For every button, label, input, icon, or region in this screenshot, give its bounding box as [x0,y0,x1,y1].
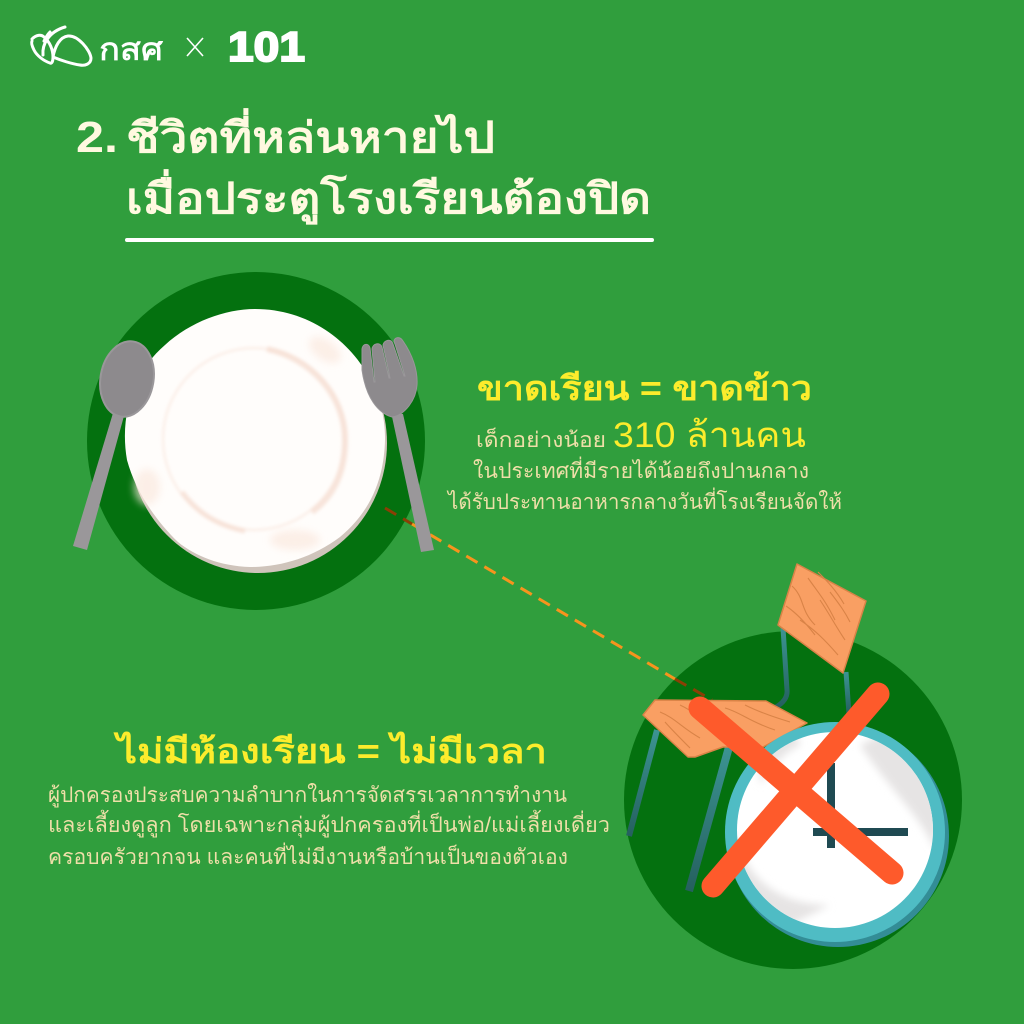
icon: กสศ leaf mark [32,27,91,65]
text block: no classroom equals no time [48,731,610,869]
title line 1: ชีวิตที่หล่นหายไป [126,108,495,161]
clock face shading [744,738,933,922]
fork head [362,338,417,417]
plate shadow edge [129,313,387,573]
body line 3: ได้รับประทานอาหารกลางวันที่โรงเรียนจัดให้ [446,487,842,514]
minute hand [827,763,835,848]
hour hand [813,828,908,836]
logo: partner logos [32,23,305,70]
illustration: chair [629,564,866,891]
heading: ไม่มีห้องเรียน = ไม่มีเวลา [113,731,547,771]
clock hands [813,763,908,848]
highlighted number: 310 ล้านคน [613,416,806,455]
spoon handle [73,413,124,550]
body line 2: และเลี้ยงดูลูก โดยเฉพาะกลุ่มผู้ปกครองที่เป็นพ่อ/แม่เลี้ยงเดี่ยว [48,810,610,838]
dark circle behind clock and chair [624,631,962,969]
ring shaded arc lower left [182,492,245,531]
text block: missing school equals missing meals [446,370,842,514]
clock shadow rim [727,725,949,947]
clock face [737,732,933,928]
ring shaded arc upper right [267,349,345,512]
red cross mark [700,694,892,886]
backrest wood grain [786,572,850,655]
dashes on dark circle [385,508,712,700]
stain left [134,469,160,505]
body line 2: ในประเทศที่มีรายได้น้อยถึงปานกลาง [473,456,809,483]
title underline [125,238,654,242]
chair seat [643,700,807,757]
dashes on green [412,524,675,679]
body line 3: ครอบครัวยากจน และคนที่ไม่มีงานหรือบ้านเป็นของตัวเอง [48,842,568,869]
illustration: spoon [73,337,160,550]
chair legs [629,628,849,891]
illustration: clock [725,722,949,947]
illustration: plate [125,309,387,573]
title line 2: เมื่อประตูโรงเรียนต้องปิด [126,169,651,225]
dark circle behind plate [87,272,425,610]
stain top right [305,331,345,369]
plate inner ring [163,348,345,531]
clock rim [725,722,945,942]
chair backrest [778,564,866,673]
illustration: fork [362,338,434,552]
plate stains [134,331,345,550]
fork handle [391,412,434,552]
body line 1: เด็กอย่างน้อย [476,426,606,452]
dashed connector line [385,508,712,700]
cross symbol [187,38,203,56]
title number: 2. [76,113,118,162]
heading: ขาดเรียน = ขาดข้าว [477,370,812,408]
logo text: 101: 101 [228,23,305,70]
plate body [125,309,385,567]
logo text: กสศ: กสศ [99,32,163,67]
seat wood grain [660,705,790,748]
stain bottom right [270,530,320,550]
spoon bowl [94,337,160,421]
body line 1: ผู้ปกครองประสบความลำบากในการจัดสรรเวลาการทำงาน [48,783,567,808]
title [76,108,654,242]
